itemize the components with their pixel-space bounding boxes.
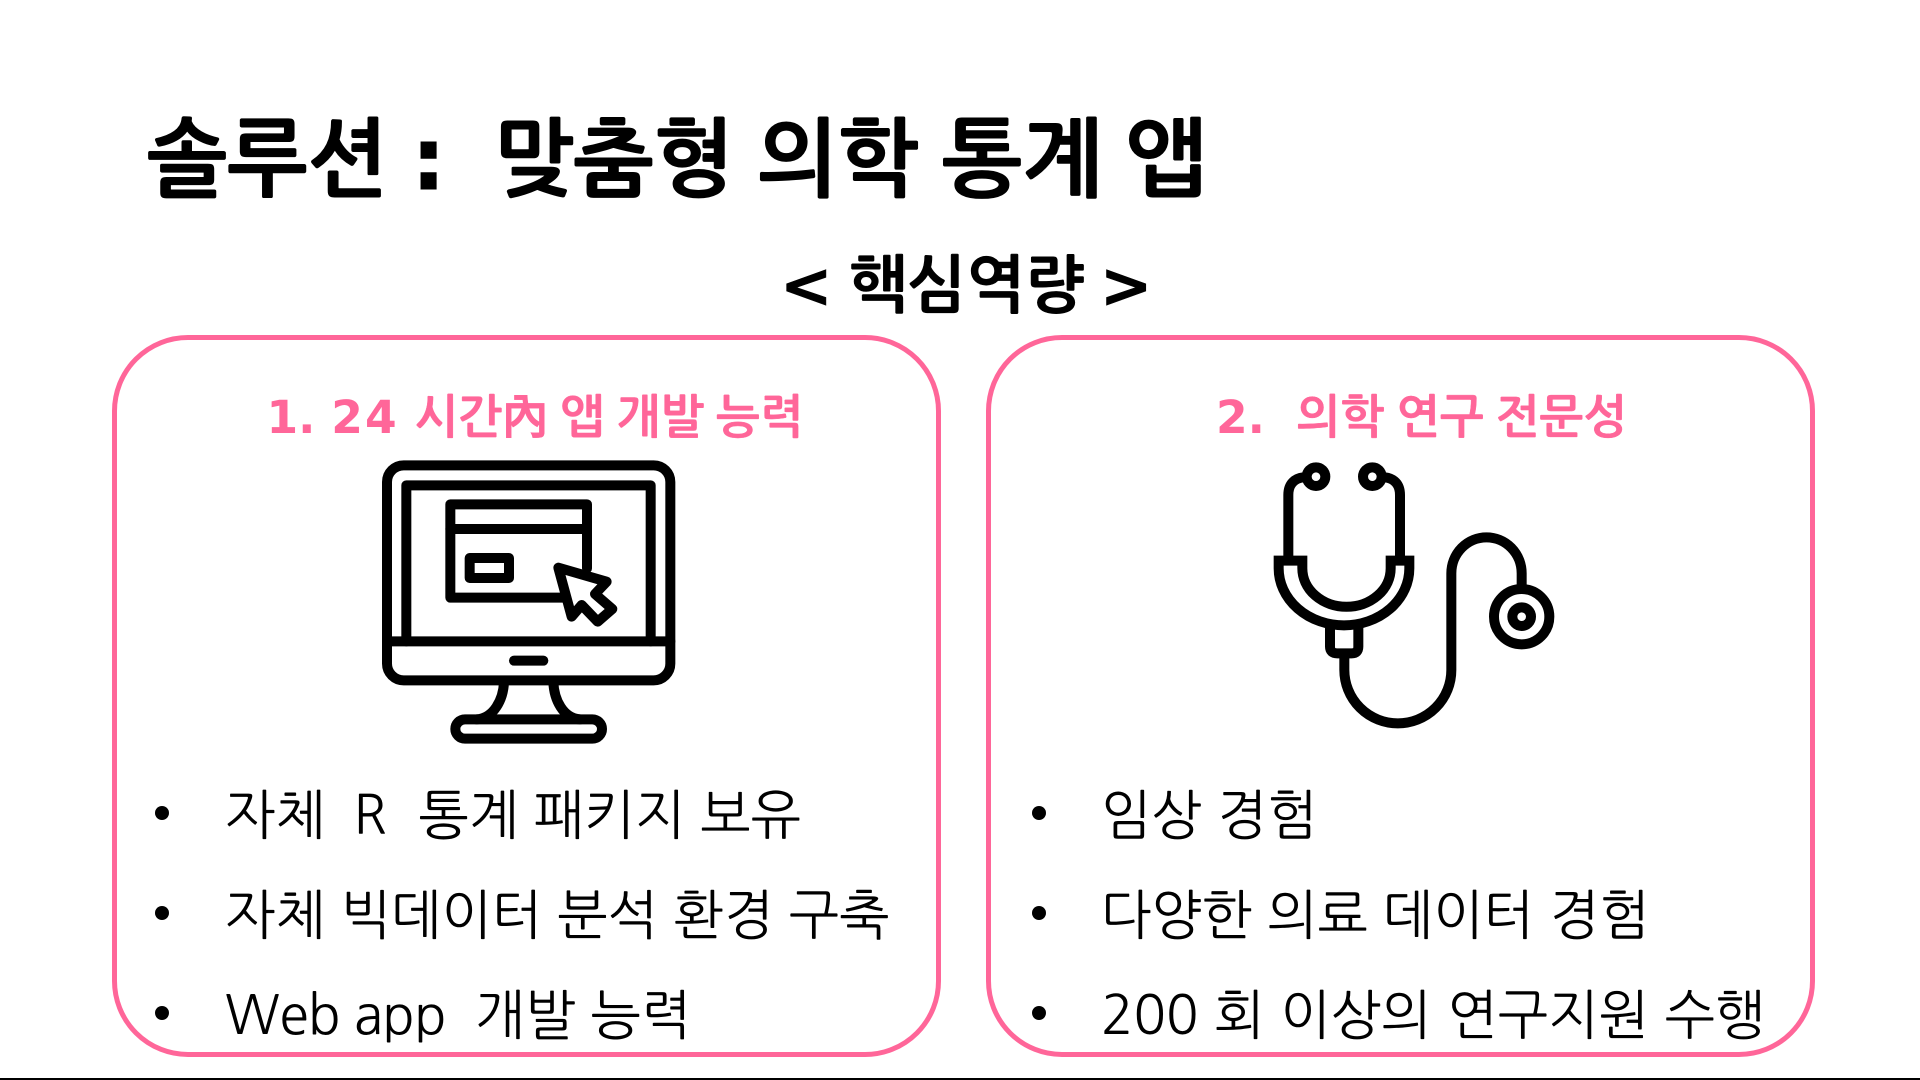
icon: stethoscope (1274, 462, 1554, 728)
bullet item 1: 자체 R 통계 패키지 보유 (225, 788, 801, 842)
panel: app development (112, 335, 941, 1057)
bullet list: app development (155, 788, 890, 1042)
subtitle: core competencies: < 핵심역량 > (780, 249, 1152, 322)
title: 솔루션 : 맞춤형 의학 통계 앱 (147, 111, 1206, 210)
icon: computer monitor with cursor (382, 460, 676, 744)
bullet item 2: 자체 빅데이터 분석 환경 구축 (225, 888, 890, 942)
bullet item 3: Web app 개발 능력 (225, 988, 691, 1042)
bottom rule (0, 1078, 1920, 1080)
panel: medical research expertise (986, 335, 1815, 1057)
bullet item 1: 임상 경험 (1101, 788, 1318, 842)
bullet item 3: 200 회 이상의 연구지원 수행 (1101, 988, 1765, 1042)
panel heading: medical research: 2. 의학 연구 전문성 (1216, 390, 1627, 444)
bullet item 2: 다양한 의료 데이터 경험 (1101, 888, 1650, 942)
bullet list: medical research (1032, 788, 1765, 1042)
panel heading: app development: 1. 24 시간內 앱 개발 능력 (266, 390, 804, 444)
